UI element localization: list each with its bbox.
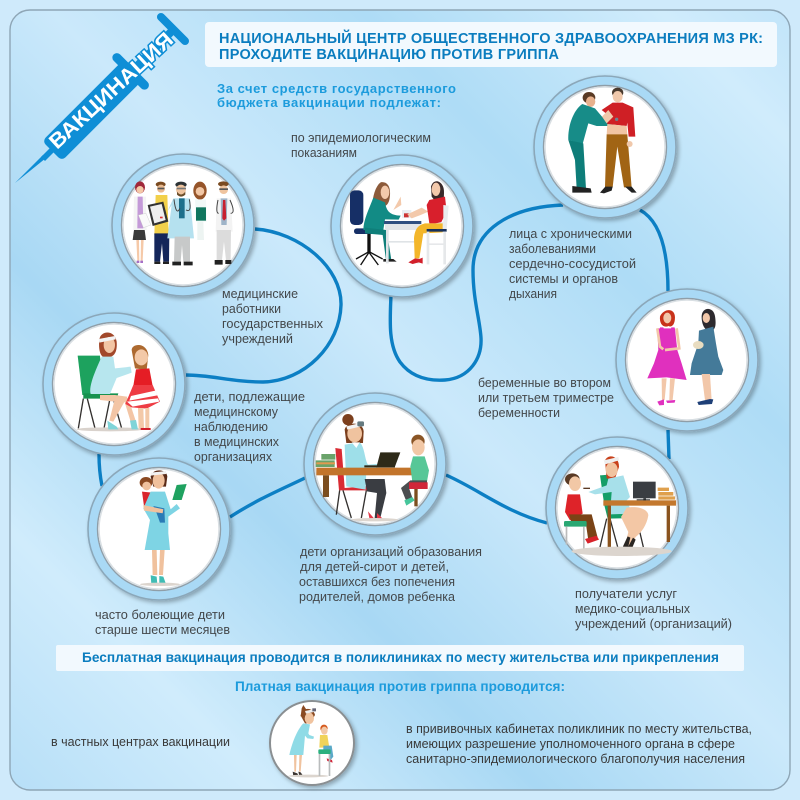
circle: chronic patients bbox=[534, 76, 676, 218]
circle: pregnant women bbox=[616, 289, 758, 431]
title box: НАЦИОНАЛЬНЫЙ ЦЕНТР ОБЩЕСТВЕННОГО ЗДРАВООХРАНЕНИЯ МЗ РК: bbox=[219, 29, 763, 47]
icon: nurse vaccinating child bbox=[270, 701, 354, 785]
text: education organizations: оставшихся без попечения bbox=[299, 575, 455, 589]
banner: free vaccination: Бесплатная вакцинация проводится в поликлиниках по месту жительства или прикрепления bbox=[82, 650, 719, 665]
text: medical workers bbox=[222, 287, 324, 346]
text: children under observation: дети, подлежащие bbox=[194, 390, 305, 404]
text: chronic patients: дыхания bbox=[509, 287, 557, 301]
text: children under observation: в медицинских bbox=[194, 435, 280, 449]
heading: paid vaccination: Платная вакцинация против гриппа проводится: bbox=[235, 679, 565, 694]
circle: social institutions bbox=[546, 437, 688, 579]
text: children under observation: медицинскому bbox=[194, 405, 279, 419]
text: frequently ill children: часто болеющие дети bbox=[95, 608, 225, 622]
circle: frequently ill children bbox=[88, 458, 230, 600]
text: pregnant women: беременности bbox=[478, 406, 560, 420]
text: chronic patients: заболеваниями bbox=[509, 242, 596, 256]
text: social institutions: медико-социальных bbox=[575, 602, 691, 616]
text: epidemiological indications: показаниям bbox=[291, 146, 357, 160]
text: education organizations bbox=[299, 545, 482, 604]
text: chronic patients: лица с хроническими bbox=[509, 227, 632, 241]
text: vaccination rooms: санитарно-эпидемиологического благополучия населения bbox=[406, 752, 745, 766]
circle: medical workers bbox=[112, 154, 254, 296]
text: medical workers: работники bbox=[222, 302, 281, 316]
text: chronic patients bbox=[509, 227, 636, 301]
text: epidemiological indications bbox=[291, 131, 431, 160]
title box bbox=[205, 22, 777, 67]
text: medical workers: государственных bbox=[222, 317, 324, 331]
text: frequently ill children bbox=[95, 608, 230, 637]
text: pregnant women: беременные во втором bbox=[478, 376, 611, 390]
text: vaccination rooms: в прививочных кабинетах поликлиник по месту жительства, bbox=[406, 722, 752, 736]
circle: epidemiological indications bbox=[331, 155, 473, 297]
text: private centers: в частных центрах вакцинации bbox=[51, 735, 230, 749]
text: children under observation bbox=[194, 390, 305, 464]
circle: children under observation bbox=[43, 313, 185, 455]
text: education organizations: дети организаций образования bbox=[300, 545, 482, 559]
syringe label: ВАКЦИНАЦИЯ bbox=[45, 28, 178, 154]
text: pregnant women: или третьем триместре bbox=[478, 391, 614, 405]
text: pregnant women bbox=[478, 376, 614, 420]
banner: free vaccination bbox=[56, 645, 744, 671]
subtitle: state budget bbox=[217, 81, 456, 110]
text: children under observation: наблюдению bbox=[194, 420, 268, 434]
text: epidemiological indications: по эпидемиологическим bbox=[291, 131, 431, 145]
title box: ПРОХОДИТЕ ВАКЦИНАЦИЮ ПРОТИВ ГРИППА bbox=[219, 47, 560, 63]
text: education organizations: для детей-сирот и детей, bbox=[300, 560, 449, 574]
text: chronic patients: системы и органов bbox=[509, 272, 618, 286]
text: social institutions bbox=[575, 587, 732, 631]
text: social institutions: получатели услуг bbox=[575, 587, 677, 601]
text: frequently ill children: старше шести месяцев bbox=[95, 623, 230, 637]
subtitle: state budget: бюджета вакцинации подлежат: bbox=[217, 95, 441, 110]
text: medical workers: учреждений bbox=[222, 332, 293, 346]
text: children under observation: организациях bbox=[194, 450, 273, 464]
icon: syringe with label bbox=[15, 11, 191, 183]
text: chronic patients: сердечно-сосудистой bbox=[509, 257, 636, 271]
connector lines bbox=[99, 205, 669, 523]
text: education organizations: родителей, домов ребенка bbox=[299, 590, 455, 604]
circle: education organizations bbox=[304, 393, 446, 535]
text: vaccination rooms: имеющих разрешение уполномоченного органа в сфере bbox=[406, 737, 735, 751]
subtitle: state budget: За счет средств государственного bbox=[217, 81, 456, 96]
text: social institutions: учреждений (организаций) bbox=[575, 617, 732, 631]
text: medical workers: медицинские bbox=[222, 287, 298, 301]
text: vaccination rooms bbox=[406, 722, 752, 766]
